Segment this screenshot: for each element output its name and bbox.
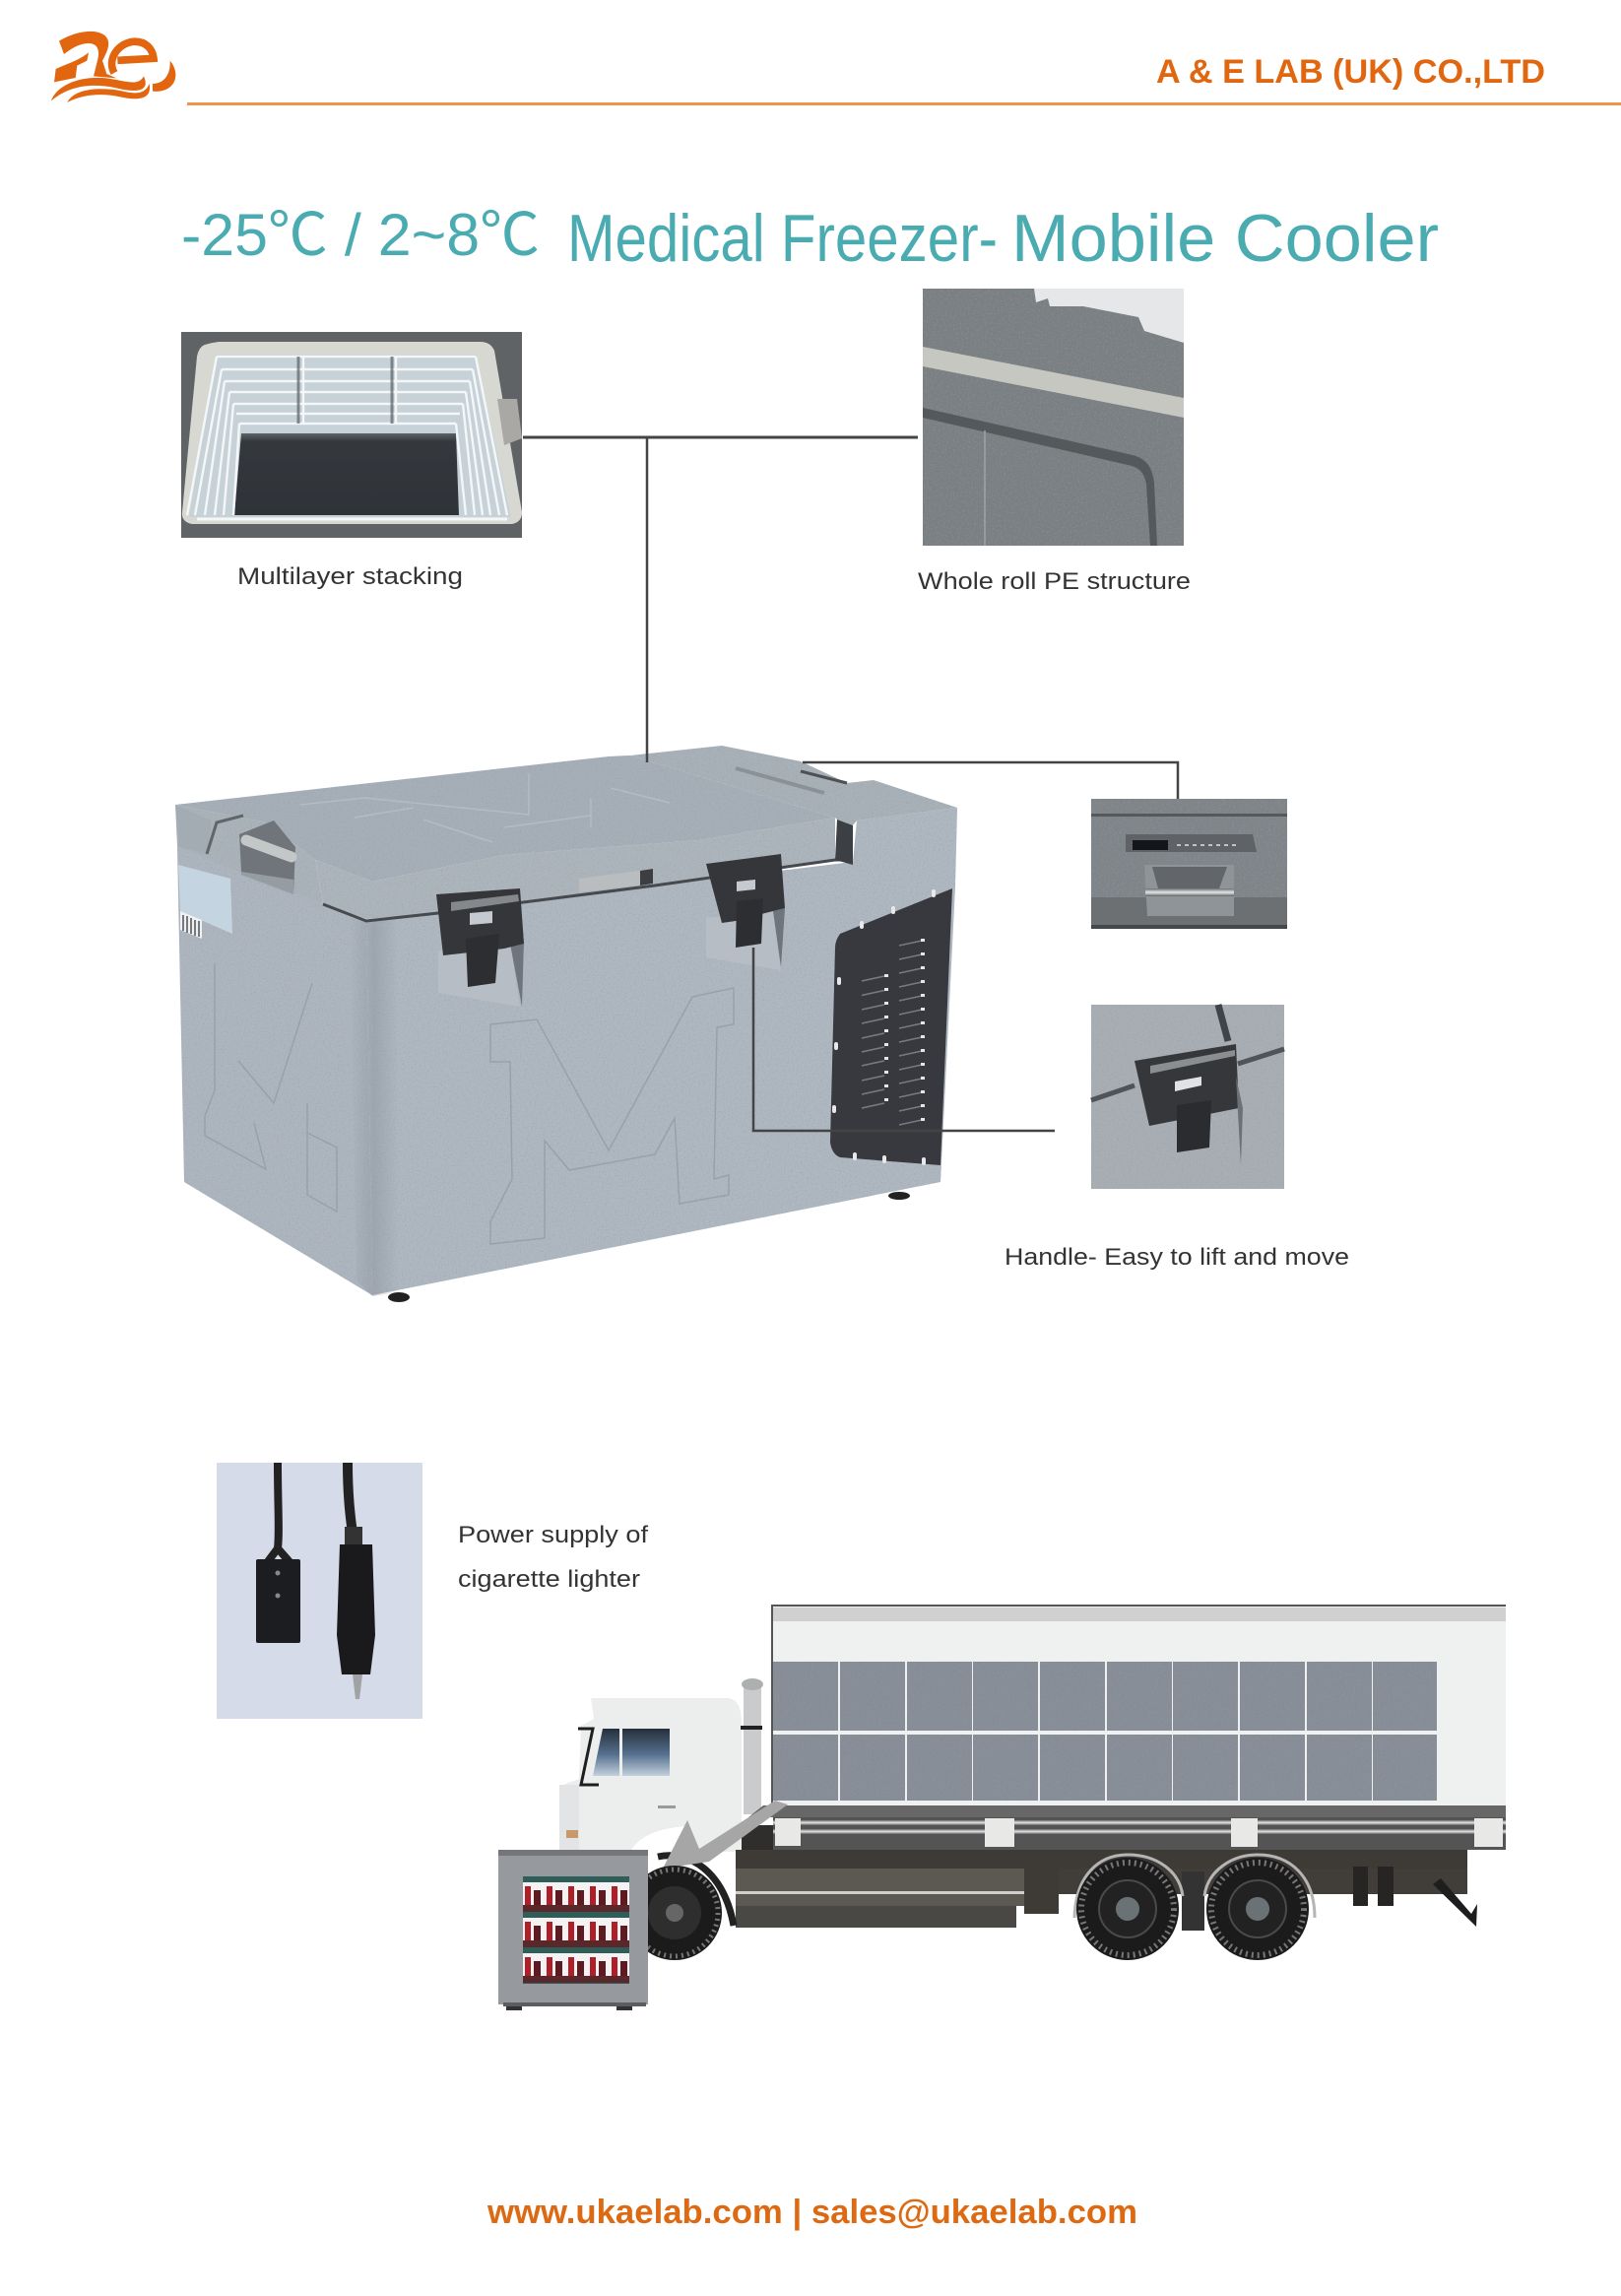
control end block top xyxy=(630,746,957,825)
label: handle: Handle- Easy to lift and move xyxy=(1005,1244,1349,1271)
front latch left xyxy=(436,888,524,987)
title: Mobile Cooler xyxy=(1011,201,1439,276)
label: power supply: cigarette lighter xyxy=(458,1566,640,1593)
wedge pointer to small cooler xyxy=(663,1801,788,1869)
lid top surface xyxy=(175,755,835,882)
lid left end base xyxy=(175,805,366,921)
small display cooler inset xyxy=(498,1850,648,2010)
engine block xyxy=(742,1825,773,1869)
photo: latch close-up xyxy=(1091,1005,1284,1189)
footer contact line: www.ukaelab.com | sales@ukaelab.com xyxy=(486,2194,1137,2231)
dark ventilation panel xyxy=(830,888,952,1165)
photo: control panel and handle xyxy=(1091,799,1287,929)
sticker label xyxy=(178,865,232,939)
label: whole roll PE structure: Whole roll PE structure xyxy=(918,568,1191,595)
cooler body long face xyxy=(366,808,957,1295)
exhaust stack xyxy=(741,1678,763,1814)
feet xyxy=(388,1292,410,1302)
connector line: control panel xyxy=(803,762,1178,828)
chassis xyxy=(736,1850,1477,1931)
truck illustration xyxy=(498,1606,1506,2010)
cargo box xyxy=(772,1606,1506,1806)
stacked coolers xyxy=(773,1662,1437,1801)
deck rail xyxy=(748,1805,1506,1817)
rear wheel two xyxy=(1204,1855,1315,1960)
shaded front corner xyxy=(350,911,399,1296)
title: -25℃ / 2~8℃ xyxy=(181,202,540,268)
rear handle slot xyxy=(579,869,653,892)
lid side flap xyxy=(175,805,212,854)
embossed M front xyxy=(490,988,734,1244)
rear wheel one xyxy=(1074,1855,1183,1960)
cab xyxy=(559,1698,742,1852)
cooler body short face xyxy=(177,847,372,1295)
label: multilayer stacking: Multilayer stacking xyxy=(237,563,463,590)
lid skirt xyxy=(315,818,835,919)
logo: A&E orange emblem xyxy=(51,32,175,102)
main product: cooler box xyxy=(175,746,957,1302)
steel handle and recess xyxy=(239,820,295,894)
connector line: down to cooler xyxy=(646,437,648,762)
company name header: A & E LAB (UK) CO.,LTD xyxy=(1156,53,1545,91)
connector line: basket to PE photo xyxy=(523,435,918,439)
photo: whole roll PE structure xyxy=(923,289,1184,546)
embossed M side xyxy=(205,963,337,1212)
side guard xyxy=(773,1817,1506,1850)
photo: multilayer basket xyxy=(181,332,522,538)
front fender xyxy=(658,1856,734,1926)
label: power supply: Power supply of xyxy=(458,1522,648,1548)
seam under lid xyxy=(323,860,853,921)
photo: cigarette lighter power cable xyxy=(217,1463,422,1719)
front latch right xyxy=(706,854,785,948)
title: Medical Freezer- xyxy=(567,201,998,276)
embossed M lid xyxy=(300,773,670,842)
connector line: latch xyxy=(753,948,1055,1131)
title xyxy=(181,201,1439,276)
latch recess right xyxy=(706,908,785,970)
latch recess left xyxy=(438,941,524,1007)
label: power supply xyxy=(458,1522,648,1593)
front wheel xyxy=(627,1866,722,1960)
